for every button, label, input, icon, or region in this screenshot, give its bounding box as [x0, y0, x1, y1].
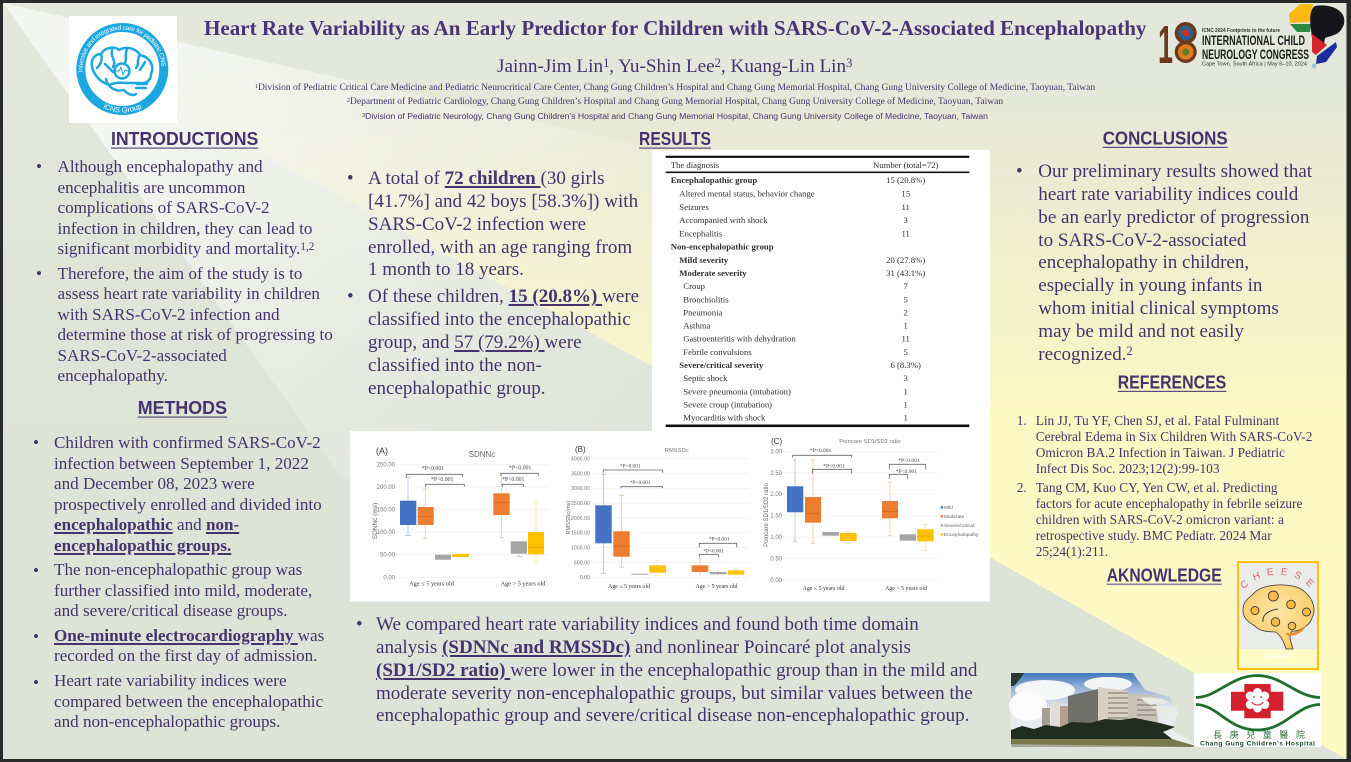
chart B: RMSSDc: Age ≤ 5 years old	[608, 584, 650, 590]
table: diagnosis by group: 3	[904, 215, 908, 225]
chart A: SDNNc: (A)	[376, 446, 388, 456]
text block: results summary: classified into the non-	[368, 355, 542, 376]
text block: introductions: complications of SARS-CoV-2	[58, 198, 270, 217]
text block: conclusions: be an early predictor of progression	[1038, 207, 1309, 228]
text block: introductions: with SARS-CoV-2 infection and	[58, 305, 280, 324]
chart A: SDNNc: 50.00	[380, 553, 396, 559]
affiliations: 1Division of Pediatric Critical Care Medicine and Pediatric Neurocritical Care Center, Chang Gung Children’s Hospital and Chang Gung Memorial Hospital, Chang Gung University College of Medicine, Taoyuan, Taiwan	[255, 83, 1095, 93]
legend: Severe/critical	[944, 523, 974, 529]
table: diagnosis by group: Septic shock	[683, 373, 728, 383]
text block: methods: recorded on the first day of admission.	[54, 646, 317, 665]
chart B: RMSSDc: *P<0.001	[709, 537, 730, 543]
text block: methods: further classified into mild, moderate,	[54, 581, 312, 600]
text block: results summary: 1 month to 18 years.	[368, 259, 524, 280]
table: diagnosis by group: Severe croup (intubation)	[683, 400, 772, 410]
text block: introductions: •	[36, 157, 42, 176]
text block: references: Lin JJ, Tu YF, Chen SJ, et al. Fatal Fulminant	[1036, 413, 1279, 428]
text block: methods: compared between the encephalopathic	[54, 692, 323, 711]
text block: HRV comparison: •	[356, 614, 363, 635]
text block: results summary: •	[347, 286, 354, 307]
table: diagnosis by group: Severe pneumonia (intubation)	[683, 386, 791, 396]
text block: conclusions: whom initial clinical symptoms	[1038, 298, 1279, 319]
text block: references	[1017, 413, 1312, 559]
table: diagnosis by group: Croup	[683, 281, 705, 291]
chart A: SDNNc: *P<0.001	[509, 465, 532, 471]
chart C: Poincare SD1/SD2 ratio	[764, 437, 979, 592]
table: diagnosis by group: 2	[904, 307, 908, 317]
table: diagnosis by group: 3	[904, 373, 908, 383]
chart C: Poincare SD1/SD2 ratio: *P<0.001	[810, 448, 832, 454]
text block: introductions: assess heart rate variability in children	[58, 284, 320, 303]
text block: references: Infect Dis Soc. 2023;12(2):99-103	[1036, 461, 1220, 476]
chart B: RMSSDc: *P<0.001	[630, 480, 651, 486]
text block: methods: Heart rate variability indices were	[54, 671, 287, 690]
text block: methods: encephalopathic and non-	[54, 515, 239, 534]
text block: methods: •	[33, 627, 39, 646]
table: diagnosis by group: Pneumonia	[683, 307, 723, 317]
image: CHEESE brain logo	[1237, 561, 1319, 670]
image: hospital photograph	[1009, 673, 1194, 747]
chart C: Poincare SD1/SD2 ratio: Age ≤ 5 years old	[803, 586, 844, 592]
text block: HRV comparison: encephalopathic group and severe/critical disease non-encephalopathic group.	[376, 705, 969, 726]
logo: International Child Neurology Congress: 1	[1158, 15, 1173, 75]
authors: Jainn-Jim Lin1, Yu-Shin Lee2, Kuang-Lin Lin3	[497, 56, 852, 77]
chart A: SDNNc: 150.00	[377, 508, 396, 514]
logo: International Child Neurology Congress: Cape Town, South Africa | May 6–10, 2024	[1202, 62, 1307, 68]
text block: conclusions: especially in young infants in	[1038, 275, 1262, 296]
text block: introductions: encephalopathy.	[58, 366, 168, 385]
table: diagnosis by group: Mild severity	[679, 255, 729, 265]
logo: ICNS Group: Intensive and integrated care for pediatric CNS	[78, 25, 166, 72]
chart C: Poincare SD1/SD2 ratio: (C)	[771, 437, 782, 446]
text block: methods: The non-encephalopathic group was	[54, 560, 302, 579]
table: diagnosis by group: Altered mental status, behavior change	[679, 189, 815, 199]
chart A: SDNNc: *P<0.001	[502, 477, 525, 483]
chart A: SDNNc: SDNNc	[469, 450, 495, 459]
logo: Chang Gung Children's Hospital: Chang Gung Children's Hospital	[1200, 740, 1315, 748]
text block: references: retrospective study. BMC Pediatr. 2024 Mar	[1036, 528, 1272, 543]
heading: introductions: INTRODUCTIONS	[111, 128, 258, 149]
text block: conclusions: •	[1016, 161, 1023, 182]
logo: Chang Gung Children's Hospital: 長庚兒童醫院	[1213, 728, 1305, 741]
chart A: SDNNc: 200.00	[377, 485, 396, 491]
table: diagnosis by group: Myocarditis with shock	[683, 413, 766, 423]
legend: Moderate	[944, 514, 965, 520]
text block: conclusions	[1016, 161, 1312, 365]
text block: conclusions: encephalopathy in children,	[1038, 252, 1249, 273]
text block: results summary: Of these children, 15 (20.8%) were	[368, 286, 639, 307]
text block: HRV comparison: moderate severity non-encephalopathic groups, but similar values between the	[376, 683, 973, 704]
heading: references: REFERENCES	[1118, 371, 1226, 392]
logo: Chang Gung Children's Hospital	[1194, 673, 1321, 748]
text block: results summary	[347, 168, 639, 399]
chart B: RMSSDc: RMSSDc	[665, 448, 689, 454]
image: CHEESE brain logo: CHEESE	[1240, 568, 1314, 588]
table: diagnosis by group: Non-encephalopathic group	[671, 242, 774, 252]
table: diagnosis by group: 31 (43.1%)	[886, 268, 925, 278]
text block: methods	[33, 433, 324, 731]
text block: references: 1.	[1017, 413, 1027, 428]
text block: methods: prospectively enrolled and divided into	[54, 495, 322, 514]
legend: Mild	[944, 505, 953, 511]
heading: results: RESULTS	[639, 128, 711, 149]
text block: references: factors for acute encephalopathy in febrile seizure	[1036, 496, 1302, 511]
chart B: RMSSDc: 2500.00	[571, 501, 590, 507]
text block: introductions: significant morbidity and mortality.1,2	[58, 239, 314, 258]
chart B: RMSSDc: (B)	[575, 445, 586, 454]
table: diagnosis by group: Asthma	[683, 321, 710, 331]
text block: results summary: encephalopathic group.	[368, 378, 546, 399]
affiliations: 2Department of Pediatric Cardiology, Chang Gung Children’s Hospital and Chang Gung Memorial Hospital, Chang Gung University College of Medicine, Taoyuan, Taiwan	[347, 97, 1003, 107]
chart C: Poincare SD1/SD2 ratio: 2.50	[770, 471, 783, 477]
text block: results summary: group, and 57 (79.2%) were	[368, 332, 582, 353]
logo: International Child Neurology Congress	[1158, 4, 1344, 75]
text block: conclusions: recognized.2	[1038, 344, 1133, 365]
chart B: RMSSDc: 4000.00	[571, 456, 590, 462]
heading: conclusions: CONCLUSIONS	[1103, 127, 1228, 148]
table: diagnosis by group: 15	[901, 189, 910, 199]
heading: methods: METHODS	[138, 397, 227, 418]
text block: results summary: enrolled, with an age ranging from	[368, 237, 632, 258]
text block: introductions: determine those at risk of progressing to	[58, 325, 333, 344]
chart A: SDNNc: *P<0.001	[431, 477, 454, 483]
table: diagnosis by group: Severe/critical severity	[679, 360, 764, 370]
chart C: Poincare SD1/SD2 ratio: *P<0.001	[823, 464, 845, 470]
text block: methods: •	[33, 561, 39, 580]
chart B: RMSSDc: 500.00	[574, 560, 590, 566]
chart A: SDNNc: *P<0.001	[422, 466, 444, 472]
affiliations: 3Division of Pediatric Neurology, Chang Gung Children’s Hospital and Chang Gung Memorial Hospital, Chang Gung University College of Medicine, Taoyuan, Taiwan	[362, 111, 988, 121]
text block: introductions: Therefore, the aim of the study is to	[58, 264, 302, 283]
image: CHEESE brain logo: Thinkerbell	[1263, 654, 1291, 660]
chart B: RMSSDc	[566, 445, 748, 590]
table: diagnosis by group: 20 (27.8%)	[886, 255, 925, 265]
table: diagnosis by group: 11	[902, 228, 910, 238]
chart C: Poincare SD1/SD2 ratio: Poincare SD1/SD2 ratio	[839, 439, 901, 445]
text block: introductions: encephalitis are uncommon	[58, 178, 245, 197]
heading: acknowledge: AKNOWLEDGE	[1107, 564, 1222, 585]
text block: methods: and severe/critical disease groups.	[54, 601, 288, 620]
legend	[941, 505, 979, 538]
table: diagnosis by group: 5	[904, 294, 908, 304]
table: diagnosis by group: 5	[904, 347, 908, 357]
chart B: RMSSDc: 3500.00	[571, 471, 590, 477]
table: diagnosis by group: Moderate severity	[679, 268, 747, 278]
text block: methods: and December 08, 2023 were	[54, 474, 255, 493]
legend: Encephalopathy	[944, 532, 979, 538]
table: diagnosis by group: 1	[904, 386, 908, 396]
text block: introductions	[36, 157, 333, 385]
charts panel	[350, 431, 990, 602]
table: diagnosis by group: 11	[902, 202, 910, 212]
table: diagnosis by group: The diagnosis	[671, 160, 720, 170]
table: diagnosis by group: Accompanied with shock	[679, 215, 768, 225]
table: diagnosis by group	[652, 150, 990, 431]
text block: HRV comparison: (SD1/SD2 ratio) were lower in the encephalopathic group than in the mild and	[376, 660, 977, 681]
chart B: RMSSDc: 0.00	[580, 575, 590, 581]
text block: HRV comparison: We compared heart rate variability indices and found both time domain	[376, 614, 919, 635]
table: diagnosis by group: Febrile convulsions	[683, 347, 752, 357]
chart C: Poincare SD1/SD2 ratio: 0.50	[770, 557, 783, 563]
chart C: Poincare SD1/SD2 ratio: *P<0.001	[896, 469, 917, 475]
chart B: RMSSDc: Age > 5 years old	[696, 584, 738, 590]
table: diagnosis by group: 6 (8.3%)	[890, 360, 921, 370]
chart A: SDNNc: 0.00	[383, 575, 396, 581]
text block: references: 2.	[1017, 480, 1027, 495]
text block: conclusions: Our preliminary results showed that	[1038, 161, 1312, 182]
text block: conclusions: may be mild and not easily	[1038, 321, 1244, 342]
table: diagnosis by group: Encephalopathic group	[671, 175, 757, 185]
chart C: Poincare SD1/SD2 ratio: 1.00	[770, 535, 783, 541]
affiliations	[255, 83, 1095, 121]
text block: results summary: A total of 72 children (30 girls	[368, 168, 604, 189]
chart C: Poincare SD1/SD2 ratio: 2.00	[770, 492, 783, 498]
text block: conclusions: to SARS-CoV-2-associated	[1038, 230, 1246, 251]
table: diagnosis by group: 1	[904, 321, 908, 331]
text block: results summary: [41.7%] and 42 boys [58.3%]) with	[368, 191, 638, 212]
chart B: RMSSDc: 1500.00	[571, 531, 590, 537]
table: diagnosis by group: 7	[904, 281, 909, 291]
text block: introductions: •	[36, 264, 42, 283]
chart B: RMSSDc: 1000.00	[571, 545, 590, 551]
text block: results summary: •	[347, 168, 354, 189]
chart C: Poincare SD1/SD2 ratio: 3.00	[770, 449, 783, 455]
chart A: SDNNc: Age ≤ 5 years old	[409, 580, 455, 588]
text block: HRV comparison	[356, 614, 978, 726]
table: diagnosis by group: Number (total=72)	[873, 160, 939, 170]
chart B: RMSSDc: *P<0.001	[620, 464, 641, 470]
chart A: SDNNc: SDNNc (ms)	[372, 503, 379, 539]
chart C: Poincare SD1/SD2 ratio: *P<0.001	[898, 458, 920, 464]
text block: methods: •	[33, 673, 39, 692]
logo: ICNS Group	[69, 16, 177, 123]
text block: conclusions: heart rate variability indices could	[1038, 184, 1298, 205]
table: diagnosis by group: 15 (20.8%)	[886, 175, 925, 185]
text block: introductions: Although encephalopathy and	[58, 157, 263, 176]
chart A: SDNNc: Age > 5 years old	[501, 580, 546, 588]
chart C: Poincare SD1/SD2 ratio: Poincare SD1/SD2 ratio	[764, 482, 770, 547]
text block: introductions: SARS-CoV-2-associated	[58, 346, 227, 365]
table: diagnosis by group: 1	[904, 413, 908, 423]
chart B: RMSSDc: 3000.00	[571, 486, 590, 492]
table: diagnosis by group: 1	[904, 400, 908, 410]
text block: references: 25;24(1):211.	[1036, 544, 1108, 559]
table: diagnosis by group: Gastroenteritis with dehydration	[683, 334, 796, 344]
text block: methods: One-minute electrocardiography was	[54, 626, 324, 645]
text block: references: Omicron BA.2 Infection in Taiwan. J Pediatric	[1036, 445, 1285, 460]
text block: results summary: classified into the encephalopathic	[368, 309, 631, 330]
text block: references: children with SARS-CoV-2 omicron variant: a	[1036, 512, 1284, 527]
chart B: RMSSDc: 2000.00	[571, 516, 590, 522]
text block: methods: infection between September 1, 2022	[54, 454, 309, 473]
chart C: Poincare SD1/SD2 ratio: Age > 5 years old	[885, 586, 927, 592]
text block: references: Tang CM, Kuo CY, Yen CW, et al. Predicting	[1036, 480, 1278, 495]
chart A: SDNNc	[372, 446, 548, 588]
text block: introductions: infection in children, they can lead to	[58, 219, 312, 238]
title: Heart Rate Variability as An Early Predictor for Children with SARS-CoV-2-Associated Encephalopathy	[204, 16, 1146, 40]
text block: methods: encephalopathic groups.	[54, 536, 231, 555]
text block: methods: •	[33, 433, 39, 452]
chart C: Poincare SD1/SD2 ratio: 0.00	[770, 578, 783, 584]
text block: references: Cerebral Edema in Six Children With SARS-CoV-2	[1036, 429, 1312, 444]
text block: methods: and non-encephalopathic groups.	[54, 712, 280, 731]
table: diagnosis by group: 11	[902, 334, 910, 344]
table: diagnosis by group: Bronchiolitis	[683, 294, 729, 304]
table: diagnosis by group: Encephalitis	[679, 228, 723, 238]
chart B: RMSSDc: *P<0.001	[703, 548, 724, 554]
chart C: Poincare SD1/SD2 ratio: 1.50	[770, 514, 783, 520]
logo: International Child Neurology Congress: ICNC 2024 Footprints to the future	[1202, 28, 1280, 34]
chart B: RMSSDc: RMSSDc(ms)	[566, 501, 572, 535]
chart A: SDNNc: 250.00	[377, 462, 396, 468]
table: diagnosis by group: Seizures	[679, 202, 709, 212]
text block: methods: Children with confirmed SARS-CoV-2	[54, 433, 321, 452]
text block: results summary: SARS-CoV-2 infection were	[368, 214, 586, 235]
logo: ICNS Group: iCNS Group	[103, 103, 142, 112]
chart A: SDNNc: 100.00	[377, 530, 396, 536]
text block: HRV comparison: analysis (SDNNc and RMSSDc) and nonlinear Poincaré plot analysis	[376, 637, 911, 658]
